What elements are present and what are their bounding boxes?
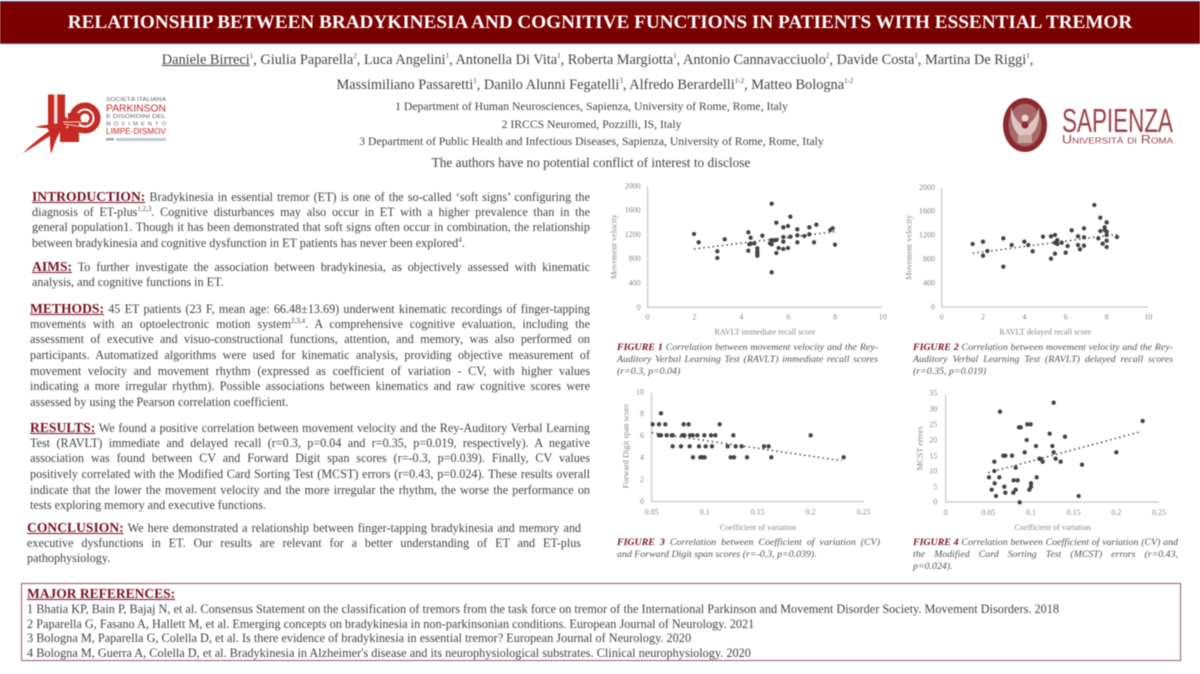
scatter chart: figure 4: MCST errors [915, 426, 924, 470]
scatter chart: figure 4: 0.15 [1067, 508, 1081, 517]
scatter chart: figure 1: 10 [879, 313, 887, 322]
scatter chart: figure 3: 8 [640, 409, 644, 418]
scatter chart: figure 3: 0.25 [857, 508, 871, 517]
scatter chart: figure 4: 0.1 [1026, 508, 1036, 517]
scatter chart: figure 1: 400 [629, 279, 641, 288]
scatter chart: figure 4: 5 [933, 482, 937, 491]
scatter chart: figure 2: RAVLT delayed recall score [999, 327, 1092, 336]
results: Test (RAVLT) immediate and delayed recall (r=0.3, p=0.04 and r=0.35, p=0.019, respectively). A negative [30, 436, 590, 450]
scatter chart: figure 3: 0 [640, 497, 644, 506]
scatter chart: figure 3: 2 [640, 475, 644, 484]
caption: figure 2: FIGURE 2 Correlation between movement velocity and the Rey- [913, 342, 1173, 353]
scatter chart: figure 2: 800 [923, 255, 935, 264]
logo: LIMPE-DISMOV society: MOVIMENTO [106, 122, 167, 128]
scatter chart: figure 3: 4 [640, 453, 644, 462]
logo: LIMPE-DISMOV society: E DISORDINI DEL [106, 114, 166, 120]
methods: movement velocity and movement rhythm (expressed as coefficient of variation - CV, with higher values [30, 364, 590, 378]
scatter chart: figure 3: 10 [636, 387, 644, 396]
results: positively correlated with the Modified Card Sorting Test (MCST) errors (r=0.43, p=0.024). These results overall [30, 467, 590, 481]
caption: figure 1: Auditory Verbal Learning Test (RAVLT) immediate recall scores [617, 354, 878, 365]
scatter chart: figure 1: Movement velocity [610, 213, 619, 279]
results: tests exploring memory and executive functions. [30, 498, 266, 512]
conclusion: CONCLUSION: We here demonstrated a relationship between finger-tapping bradykinesia and memory and [27, 520, 581, 535]
scatter chart: figure 1: 0 [637, 303, 641, 312]
scatter chart: figure 4: 25 [929, 420, 937, 429]
conclusion: pathophysiology. [27, 551, 110, 565]
scatter chart: figure 3: 0.1 [700, 508, 710, 517]
logo: LIMPE-DISMOV society: SOCIETÀ ITALIANA [106, 96, 166, 103]
scatter chart: figure 3: 0.2 [806, 508, 816, 517]
authors and affiliations [161, 52, 1034, 171]
caption: figure 1: FIGURE 1 Correlation between movement velocity and the Rey- [617, 342, 878, 353]
caption: figure 3 [616, 537, 880, 560]
caption: figure 4: the Modified Card Sorting Test (MCST) errors (r=0.43, [913, 549, 1178, 560]
title banner [0, 1, 1200, 44]
scatter chart: figure 2: 1200 [919, 231, 935, 240]
affiliation 2: 2 IRCCS Neuromed, Pozzilli, IS, Italy [502, 118, 681, 130]
scatter chart: figure 4: 0 [933, 498, 937, 507]
methods: participants. Automatized algorithms were used for kinematic analysis, providing objective measurement of [30, 348, 590, 362]
scatter chart: figure 1: 0 [646, 313, 650, 322]
scatter chart: figure 2: 0 [931, 303, 935, 312]
caption: figure 2 [912, 342, 1174, 377]
scatter chart: figure 4 [915, 388, 1166, 532]
scatter chart: figure 2: 400 [923, 279, 935, 288]
logo: Sapienza wordmark: Università di Roma [1062, 134, 1174, 146]
scatter chart: figure 1: 6 [786, 313, 790, 322]
scatter chart: figure 3: 6 [640, 431, 644, 440]
caption: figure 4: p=0.024). [913, 561, 953, 572]
aims: AIMS: To further investigate the association between bradykinesia, as objectively assessed with kinematic [32, 259, 590, 274]
logo: LIMPE-DISMOV society: PARKINSON [106, 104, 166, 114]
references box [21, 583, 1181, 661]
conclusion [26, 520, 582, 566]
reference list: 3 Bologna M, Paparella G, Colella D, et al. Is there evidence of bradykinesia in essential tremor? European Journal of Neurology. 2020 [27, 631, 691, 645]
results: indicate that the lower the movement velocity and the more irregular the rhythm, the worse the performance on [30, 483, 590, 497]
scatter chart: figure 1: 4 [739, 313, 743, 322]
scatter chart: figure 2 [904, 183, 1152, 336]
scatter chart: figure 1: 1600 [625, 206, 641, 215]
scatter chart: figure 4: 0.2 [1111, 508, 1121, 517]
caption: figure 4: FIGURE 4 Correlation between Coefficient of variation (CV) and [913, 537, 1178, 548]
scatter chart: figure 2: Movement velocity [904, 214, 913, 280]
scatter chart: figure 3: Forward Digit span score [621, 403, 630, 488]
scatter chart: figure 1: RAVLT immediate recall score [714, 328, 816, 337]
scatter chart: figure 1: 2 [692, 313, 696, 322]
scatter chart: figure 2: 4 [1022, 313, 1026, 322]
scatter chart: figure 4: 15 [929, 451, 937, 460]
scatter chart: figure 1: 2000 [625, 181, 641, 190]
scatter chart: figure 4: 10 [929, 467, 937, 476]
methods: METHODS: 45 ET patients (23 F, mean age: 66.48±13.69) underwent kinematic recordings of finger-tapping [30, 301, 590, 316]
conclusion: executive dysfunctions in ET. Our results are relevant for a better understanding of ET and ET-plus [27, 536, 581, 550]
aims: analysis, and cognitive functions in ET. [32, 275, 224, 289]
scatter chart: figure 2: 2 [981, 313, 985, 322]
scatter chart: figure 2: 0 [940, 313, 944, 322]
scatter chart: figure 4: 0 [944, 508, 948, 517]
conflict of interest statement: The authors have no potential conflict of interest to disclose [432, 155, 750, 170]
scatter chart: figure 4: 35 [929, 388, 937, 397]
logo: Sapienza seal [1003, 98, 1047, 152]
scatter chart: figure 2: 6 [1064, 313, 1068, 322]
methods: assessed by using the Pearson correlation coefficient. [30, 395, 288, 409]
results [29, 420, 590, 512]
caption: figure 3: and Forward Digit span scores (r=-0.3, p=0.039). [617, 549, 817, 560]
results: association was found between CV and Forward Digit span scores (r=-0.3, p=0.039). Finally, CV values [30, 451, 590, 465]
scatter chart: figure 4: 0.25 [1152, 508, 1166, 517]
scatter chart: figure 1: 1200 [625, 230, 641, 239]
scatter chart: figure 1: 8 [833, 313, 837, 322]
logo: Sapienza wordmark [1062, 102, 1174, 146]
reference list: 2 Paparella G, Fasano A, Hallett M, et al. Emerging concepts on bradykinesia in non-parkinsonian conditions. European Journal of Neurology. 2021 [27, 617, 754, 631]
caption: figure 3: FIGURE 3 Correlation between Coefficient of variation (CV) [617, 537, 880, 548]
scatter chart: figure 3: 0.05 [645, 508, 659, 517]
introduction: general population1. Though it has been demonstrated that soft signs often occur in combination, the relationship [32, 220, 590, 234]
logo: LIMPE-DISMOV society: LIMPE-DISMOV [106, 127, 167, 136]
scatter chart: figure 2: 1600 [919, 207, 935, 216]
caption: figure 1: (r=0.3, p=0.04) [617, 366, 680, 377]
scatter chart: figure 2: 10 [1144, 313, 1152, 322]
results: RESULTS: We found a positive correlation between movement velocity and the Rey-Auditory Verbal Learning [30, 420, 590, 435]
scatter chart: figure 3: 0.15 [751, 508, 765, 517]
methods: indicating a more irregular rhythm). Possible associations between kinematics and raw cognitive scores were [30, 379, 590, 393]
reference list [26, 602, 1060, 660]
scatter chart: figure 4: 30 [929, 404, 937, 413]
author list line 1: Daniele Birreci1, Giulia Paparella2, Luca Angelini1, Antonella Di Vita1, Roberta Margiotta1, Antonio Cannavacciuolo2, Davide Costa1, Martina De Riggi1, [162, 52, 1033, 68]
affiliation 3: 3 Department of Public Health and Infectious Diseases, Sapienza, University of Rome, Rome, Italy [359, 135, 824, 148]
author list line 2: Massimiliano Passaretti1, Danilo Alunni Fegatelli3, Alfredo Berardelli1-2, Matteo Bologna1-2 [337, 77, 853, 93]
caption: figure 1 [616, 342, 878, 377]
methods: assessment of executive and visuo-constructional functions, attention, and memory, was also performed on [30, 332, 590, 346]
caption: figure 2: Auditory Verbal Learning Test (RAVLT) delayed recall scores [913, 354, 1173, 365]
scatter chart: figure 2: 8 [1105, 313, 1109, 322]
scatter chart: figure 4: 0.05 [981, 508, 995, 517]
scatter chart: figure 4: 20 [929, 436, 937, 445]
scatter chart: figure 1: 800 [629, 254, 641, 263]
reference list: 4 Bologna M, Guerra A, Colella D, et al. Bradykinesia in Alzheimer's disease and its neurophysiological substrates. Clinical neurophysiology. 2020 [27, 646, 751, 660]
introduction: diagnosis of ET-plus1,2,3. Cognitive disturbances may also occur in ET with a higher prevalence than in the [32, 205, 590, 219]
introduction: INTRODUCTION: Bradykinesia in essential tremor (ET) is one of the so-called ‘soft signs’ configuring the [32, 189, 590, 204]
aims [31, 259, 590, 290]
caption: figure 2: (r=0.35, p=0.019) [913, 366, 986, 377]
references heading: MAJOR REFERENCES: [27, 586, 175, 601]
caption: figure 4 [912, 537, 1178, 572]
introduction [31, 189, 590, 250]
scatter chart: figure 4: Coefficient of variation [1014, 523, 1091, 532]
affiliation 1: 1 Department of Human Neurosciences, Sapienza, University of Rome, Rome, Italy [395, 100, 788, 112]
scatter chart: figure 2: 2000 [919, 183, 935, 192]
scatter chart: figure 3: Coefficient of variation [720, 523, 796, 532]
title banner: RELATIONSHIP BETWEEN BRADYKINESIA AND COGNITIVE FUNCTIONS IN PATIENTS WITH ESSENTIAL TREMOR [68, 12, 1132, 33]
methods [29, 301, 591, 410]
logo: LIMPE-DISMOV society [23, 94, 167, 154]
scatter chart: figure 1 [610, 181, 887, 337]
reference list: 1 Bhatia KP, Bain P, Bajaj N, et al. Consensus Statement on the classification of tremors from the task force on tremor of the International Parkinson and Movement Disorder Society. Movement Disorders. 2018 [27, 602, 1059, 616]
methods: movements with an optoelectronic motion system2,3,4. A comprehensive cognitive evaluation, including the [30, 317, 590, 331]
scatter chart: figure 3 [621, 387, 871, 532]
introduction: between bradykinesia and cognitive dysfunction in ET patients has never been explored4. [32, 236, 465, 250]
